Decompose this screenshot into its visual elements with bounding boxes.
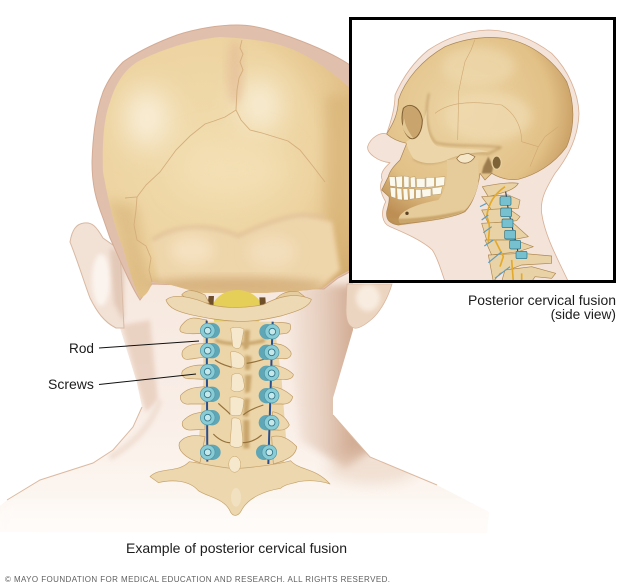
- label: Screws: [48, 374, 196, 392]
- left rod: [204, 321, 210, 462]
- yellow spinal canal: [207, 290, 266, 325]
- profile skin: [368, 30, 579, 282]
- lateral processes: [179, 318, 297, 464]
- spinous processes: [229, 327, 245, 507]
- side-view hardware: [500, 192, 527, 259]
- skull-base articular pieces: [182, 291, 307, 303]
- illustration: back of head and neck: [0, 25, 500, 545]
- brow and cheek ridge shadow: [413, 93, 501, 163]
- cheek bone: [406, 110, 488, 163]
- label: Screws: Screws: [48, 376, 94, 392]
- upper teeth: [389, 176, 445, 187]
- blue vessels: [480, 203, 510, 278]
- right ear: [346, 284, 392, 328]
- jaw joint and ear canal: [457, 153, 475, 163]
- column depth shading: [215, 330, 265, 448]
- left ear: [70, 223, 124, 328]
- cervical vertebrae side: [482, 183, 556, 282]
- shoulders and neck skin: [0, 250, 489, 533]
- caption: main view: Example of posterior cervical fusion: [126, 540, 347, 556]
- right rod: [268, 322, 273, 464]
- copyright: © MAYO FOUNDATION FOR MEDICAL EDUCATION AND RESEARCH. ALL RIGHTS RESERVED.: [5, 575, 390, 584]
- neck side shading: [109, 280, 414, 488]
- atlas C1 vertebra: [166, 296, 311, 321]
- jaw shading: [399, 160, 478, 223]
- skull sutures: [125, 40, 325, 282]
- spinal nerves: [487, 187, 522, 282]
- side skull: [382, 37, 573, 225]
- neck outline strokes: [7, 407, 437, 500]
- side skull sutures: [435, 39, 558, 167]
- label: Rod: Rod: [69, 341, 94, 356]
- inset border: [350, 18, 614, 282]
- inset white background: [350, 18, 614, 282]
- skull rear view: [95, 30, 355, 300]
- vertebral column body: [193, 322, 287, 468]
- occipital lower region: [152, 215, 340, 288]
- caption: side view: Posterior cervical fusion: [468, 293, 616, 308]
- caption: side view: [468, 293, 616, 322]
- eye orbit: [402, 105, 422, 139]
- cervical spine with hardware: [150, 290, 330, 515]
- caption: side view: (side view): [551, 307, 616, 322]
- inset panel: side view: [350, 18, 614, 282]
- right screws: [256, 324, 280, 460]
- inter-vertebral shadows: [213, 358, 267, 443]
- label: Rod: [69, 341, 199, 356]
- temporal bone highlight: [445, 92, 532, 142]
- head skin outline: [92, 25, 350, 300]
- left screws: [200, 323, 221, 460]
- C7 / T1 vertebra: [150, 461, 330, 515]
- lower teeth: [390, 187, 442, 200]
